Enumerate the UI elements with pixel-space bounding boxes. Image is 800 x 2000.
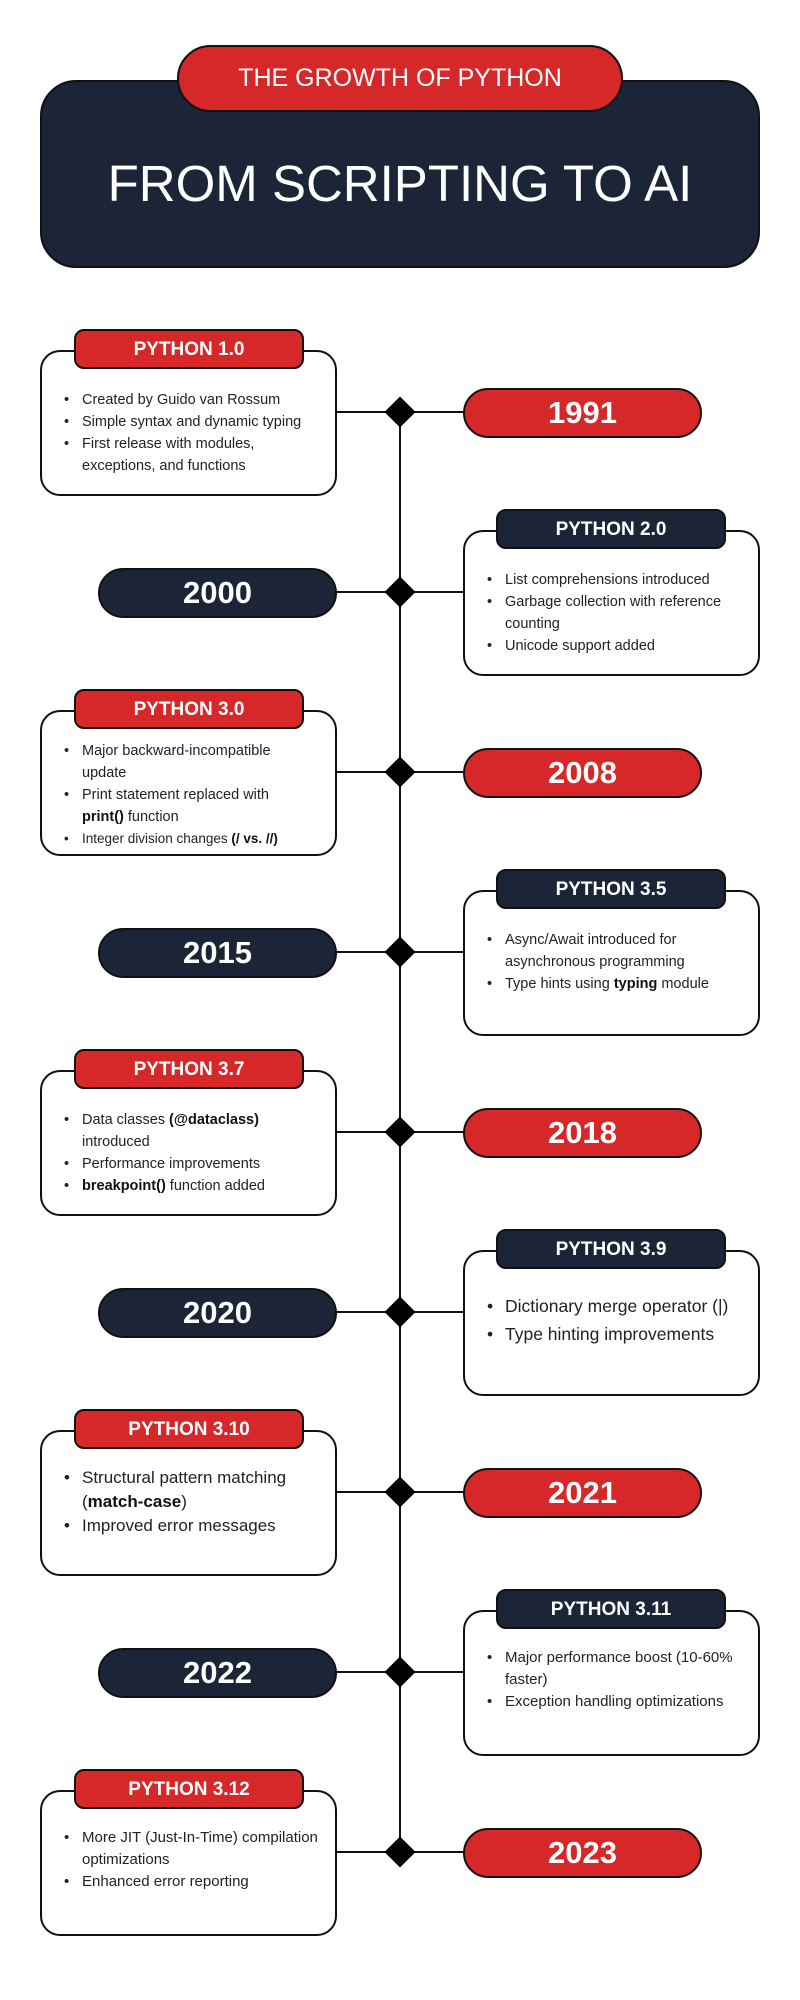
tab: Python 2.0: PYTHON 2.0	[556, 519, 666, 540]
year 2023	[463, 1828, 702, 1878]
tab: Python 3.11: PYTHON 3.11	[551, 1599, 671, 1620]
year 2000: 2000	[183, 575, 252, 610]
tab: Python 3.9: PYTHON 3.9	[556, 1239, 666, 1260]
card: Python 3.12: More JIT (Just-In-Time) compilation optimizations	[82, 1829, 318, 1868]
year 2023: 2023	[548, 1835, 617, 1870]
year 2021	[463, 1468, 702, 1518]
tab: Python 3.11	[496, 1589, 726, 1629]
card: Python 3.7: Data classes (@dataclass) introduced	[82, 1112, 259, 1150]
year 2022	[98, 1648, 337, 1698]
year 2020: 2020	[183, 1295, 252, 1330]
card: Python 3.10	[40, 1430, 337, 1576]
year 2015: 2015	[183, 935, 252, 970]
year 2000	[98, 568, 337, 618]
card: Python 3.9: Dictionary merge operator (|)	[505, 1296, 728, 1316]
diamond	[384, 936, 416, 968]
card: Python 3.7: Performance improvements	[82, 1156, 260, 1172]
diamond	[384, 396, 416, 428]
card: Python 1.0: Simple syntax and dynamic typing	[82, 414, 301, 430]
year 1991	[463, 388, 702, 438]
card: Python 3.5: Async/Await introduced for asynchronous programming	[505, 932, 685, 970]
tab: Python 2.0	[496, 509, 726, 549]
year 2018	[463, 1108, 702, 1158]
card: Python 3.0: Integer division changes (/ vs. //)	[82, 831, 278, 846]
tab: Python 3.0: PYTHON 3.0	[134, 699, 244, 720]
year 2008	[463, 748, 702, 798]
year 2021: 2021	[548, 1475, 617, 1510]
item: 2020	[98, 1229, 760, 1396]
item: 2015	[98, 869, 760, 1036]
item: 2000	[98, 509, 760, 676]
diamond	[384, 1656, 416, 1688]
year 2018: 2018	[548, 1115, 617, 1150]
year 2020	[98, 1288, 337, 1338]
item: 2021	[40, 1409, 702, 1576]
tab: Python 1.0	[74, 329, 304, 369]
card: Python 3.11: Major performance boost (10-60% faster)	[505, 1649, 733, 1688]
card: Python 2.0	[463, 530, 760, 676]
header panel	[40, 80, 760, 268]
card: Python 3.12	[40, 1790, 337, 1936]
spine	[399, 412, 401, 1852]
item: 2023	[40, 1769, 702, 1936]
tab: Python 3.5	[496, 869, 726, 909]
card: Python 3.0	[40, 710, 337, 856]
diamond	[384, 1296, 416, 1328]
item: 2022	[98, 1589, 760, 1756]
card: Python 3.11: Exception handling optimizations	[505, 1693, 723, 1710]
card: Python 3.7	[40, 1070, 337, 1216]
year 2015	[98, 928, 337, 978]
card: Python 1.0	[40, 350, 337, 496]
subtitle pill: THE GROWTH OF PYTHON	[238, 64, 562, 92]
tab: Python 3.10: PYTHON 3.10	[128, 1419, 250, 1440]
card: Python 3.0: Print statement replaced with print() function	[82, 787, 269, 825]
card: Python 2.0: Garbage collection with reference counting	[505, 594, 721, 632]
tab: Python 3.12: PYTHON 3.12	[128, 1779, 250, 1800]
card: Python 3.0: Major backward-incompatible update	[82, 743, 271, 781]
tab: Python 3.12	[74, 1769, 304, 1809]
diamond	[384, 576, 416, 608]
subtitle pill	[177, 45, 623, 112]
card: Python 1.0: Created by Guido van Rossum	[82, 392, 280, 408]
tab: Python 3.9	[496, 1229, 726, 1269]
item: 2018	[40, 1049, 702, 1216]
diamond	[384, 1116, 416, 1148]
year 2022: 2022	[183, 1655, 252, 1690]
tab: Python 3.5: PYTHON 3.5	[556, 879, 666, 900]
tab: Python 3.10	[74, 1409, 304, 1449]
card: Python 1.0: First release with modules, exceptions, and functions	[82, 436, 254, 474]
card: Python 3.9: Type hinting improvements	[505, 1324, 714, 1344]
diamond	[384, 1836, 416, 1868]
year 1991: 1991	[548, 395, 617, 430]
item: 2008	[40, 689, 702, 856]
card: Python 3.10: Structural pattern matching (match-case)	[82, 1468, 286, 1511]
card: Python 3.12: Enhanced error reporting	[82, 1873, 249, 1890]
card: Python 2.0: Unicode support added	[505, 638, 655, 654]
diamond	[384, 756, 416, 788]
tab: Python 1.0: PYTHON 1.0	[134, 339, 244, 360]
diamond	[384, 1476, 416, 1508]
year 2008: 2008	[548, 755, 617, 790]
card: Python 3.7: breakpoint() function added	[82, 1178, 265, 1194]
card: Python 2.0: List comprehensions introduced	[505, 572, 710, 588]
card: Python 3.10: Improved error messages	[82, 1516, 276, 1535]
card: Python 3.9	[463, 1250, 760, 1396]
tab: Python 3.7	[74, 1049, 304, 1089]
card: Python 3.5	[463, 890, 760, 1036]
item: 1991	[40, 329, 702, 496]
title: FROM SCRIPTING TO AI	[108, 155, 692, 212]
card: Python 3.11	[463, 1610, 760, 1756]
card: Python 3.5: Type hints using typing module	[505, 976, 709, 992]
tab: Python 3.0	[74, 689, 304, 729]
tab: Python 3.7: PYTHON 3.7	[134, 1059, 244, 1080]
